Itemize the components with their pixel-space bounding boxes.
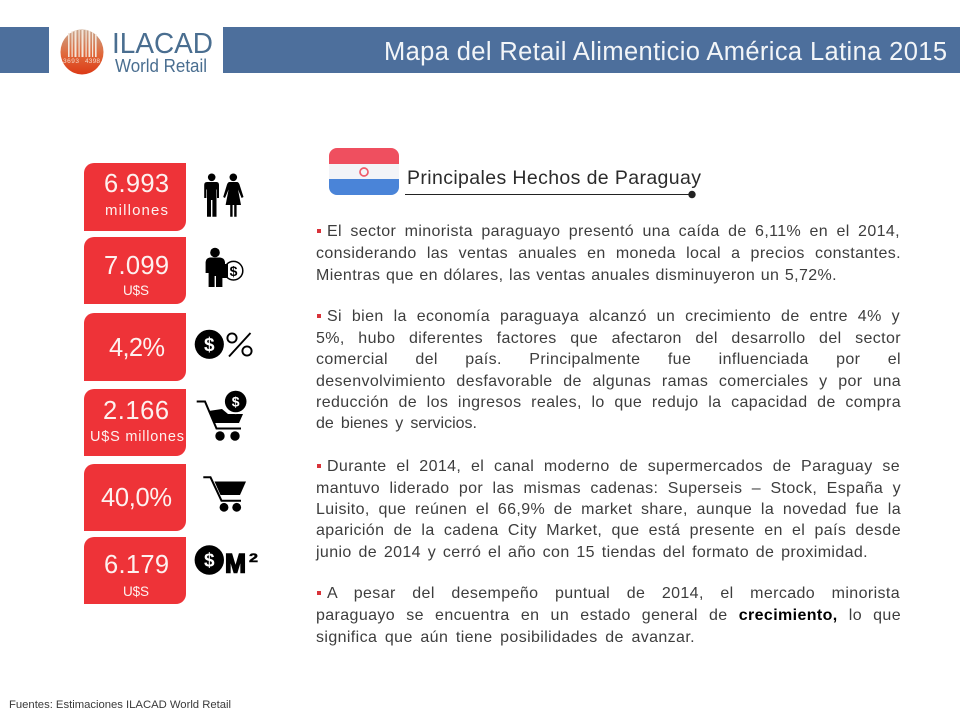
stat: retail sales: U$S millones	[90, 429, 184, 445]
stat: population	[84, 163, 186, 231]
header band: title bar	[223, 27, 960, 73]
paragraph 4	[316, 585, 901, 646]
icon: businessman with dollar: $	[230, 263, 238, 279]
text: Mientras que en dólares, las ventas anuales disminuyeron un 5,72%.	[316, 267, 837, 284]
text: A pesar del desempeño puntual de 2014, el mercado minorista	[327, 585, 900, 602]
heading: Principales Hechos de Paraguay	[405, 167, 701, 198]
stat: sales per square metre: 6.179	[104, 551, 169, 579]
logo: ILACAD World Retail	[60, 28, 213, 76]
header band: left segment	[0, 27, 49, 73]
paragraph 1	[316, 223, 901, 284]
text: aparición de la cadena City Market, que está presente en el país desde	[316, 522, 901, 539]
stat: population: 6.993	[104, 170, 169, 198]
text: Si bien la economía paraguaya alcanzó un crecimiento de entre 4% y	[327, 308, 900, 325]
stat: modern channel share: 40,0%	[101, 484, 172, 512]
logo: ILACAD World Retail: World Retail	[115, 55, 207, 76]
text: paraguayo se encuentra en un estado general de crecimiento, lo que	[316, 607, 901, 624]
heading: Principales Hechos de Paraguay: Principales Hechos de Paraguay	[407, 167, 701, 189]
stat: sales per square metre: U$S	[123, 584, 149, 599]
stat: growth percentage	[84, 313, 186, 381]
text: reducción de los ingresos reales, lo que redujo la capacidad de compra	[316, 394, 901, 411]
text: considerando las ventas anuales en moneda local a precios constantes.	[316, 245, 901, 262]
icon: barcode ball	[60, 30, 104, 74]
icon: dollar percent	[195, 330, 252, 359]
stat: sales per square metre	[84, 537, 186, 604]
text: Durante el 2014, el canal moderno de supermercados de Paraguay se	[327, 458, 900, 475]
source note: Fuentes: Estimaciones ILACAD World Retail	[9, 699, 231, 711]
text: mantuvo liderado por las mismas cadenas: Superseis – Stock, España y	[316, 480, 901, 497]
icon: cart with dollar	[197, 389, 248, 441]
text: Luisito, que reúnen el 66,9% de market share, aunque la novedad fue la	[316, 501, 901, 518]
icon: dollar per square metre: $	[204, 551, 215, 572]
text: comercial del país. Principalmente fue influenciada por el	[316, 351, 901, 368]
stat: growth percentage: 4,2%	[109, 334, 165, 362]
icon: barcode ball: 4398	[85, 58, 100, 65]
title: Mapa del Retail Alimenticio América Latina 2015	[384, 38, 947, 66]
stat: modern channel share	[84, 464, 186, 531]
text: El sector minorista paraguayo presentó una caída de 6,11% en el 2014,	[327, 223, 900, 240]
stat: GDP per capita: U$S	[123, 283, 149, 298]
icon: dollar per square metre: M	[225, 549, 246, 579]
text: de bienes y servicios.	[316, 415, 477, 432]
stat: GDP per capita	[84, 237, 186, 304]
icon: barcode ball: 3693	[63, 58, 79, 65]
icon: dollar percent: $	[204, 335, 215, 356]
icon: dollar per square metre: 2	[249, 551, 258, 565]
icon: dollar per square metre	[195, 545, 258, 579]
icon: Paraguay flag	[329, 148, 399, 195]
icon: cart with dollar: $	[232, 394, 240, 410]
text: significa que aún tiene posibilidades de avanzar.	[316, 629, 695, 646]
icon: man and woman	[204, 174, 244, 217]
icon: businessman with dollar	[206, 248, 243, 287]
icon: shopping cart	[203, 477, 246, 512]
paragraph 2	[316, 308, 901, 432]
stat: retail sales	[84, 389, 186, 456]
stat: retail sales: 2.166	[103, 397, 169, 425]
stat: population: millones	[105, 202, 168, 219]
stat: GDP per capita: 7.099	[104, 252, 169, 280]
text: desenvolvimiento desfavorable de algunas ramas comerciales y por una	[316, 373, 901, 390]
text: 5%, hubo diferentes factores que afectaron del desarrollo del sector	[316, 330, 901, 347]
text: junio de 2014 y cerró el año con 15 tiendas del formato de proximidad.	[316, 544, 868, 561]
logo: ILACAD World Retail: ILACAD	[112, 28, 213, 60]
paragraph 3	[316, 458, 901, 561]
